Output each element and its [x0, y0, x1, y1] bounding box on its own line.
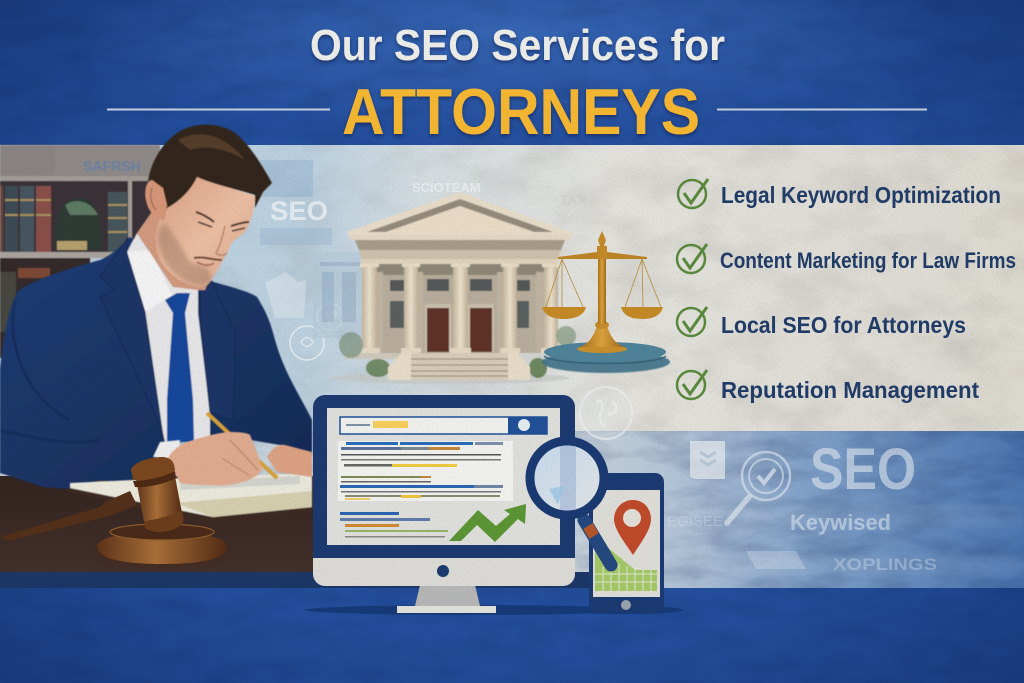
shrubs [339, 332, 363, 358]
stubble [158, 222, 212, 286]
monitor [305, 395, 683, 615]
watermark icons: lower right [667, 437, 937, 574]
watermark icons: SEO upper [260, 160, 588, 360]
jacket [0, 237, 312, 489]
eyes, brows, nose, mouth [196, 212, 249, 226]
icon: gavel [0, 457, 227, 566]
necktie [165, 293, 194, 442]
sleeve shading [0, 300, 100, 442]
notebook [62, 473, 312, 526]
watermark icons: lower right: Keywised [790, 510, 891, 535]
item: Local SEO for Attorneys: Local SEO for Attorneys [721, 312, 966, 338]
item: Reputation Management [677, 370, 979, 403]
panel: bookshelf background [0, 145, 160, 358]
person: attorney [0, 125, 312, 489]
stand [415, 585, 480, 606]
map pin [614, 500, 651, 555]
stairs [402, 353, 517, 380]
watermark icons: SEO upper: SEO [270, 196, 328, 226]
neck [137, 210, 215, 290]
watermark icons: SEO upper: TAX [560, 192, 588, 208]
hair [148, 125, 272, 220]
panel: bookshelf background: SAFRSH [83, 158, 141, 174]
service list [677, 179, 1016, 403]
shirt [127, 233, 210, 442]
frame [313, 395, 575, 586]
icon: green growth arrow [449, 504, 526, 542]
title [310, 21, 725, 148]
watermark icons: lower right: SEO [810, 437, 916, 502]
search bar [340, 417, 547, 434]
item: Legal Keyword Optimization: Legal Keyword Optimization [721, 182, 1001, 208]
left lapel [100, 238, 164, 443]
title: ATTORNEYS [342, 75, 700, 148]
hands and pencil [153, 413, 312, 486]
watermark icons: lower right: XOPLINGS [833, 555, 937, 574]
screen [327, 408, 560, 545]
columns [362, 266, 377, 352]
watermark icons: SEO upper: SCIOTEAM [412, 180, 481, 195]
ear [145, 180, 167, 219]
windows [390, 280, 405, 291]
panel: central light band [0, 145, 1024, 588]
phone [589, 473, 664, 613]
result rows [346, 442, 398, 445]
doors [425, 304, 451, 352]
face [156, 177, 255, 287]
map grid [595, 537, 657, 591]
item: Local SEO for Attorneys [677, 307, 966, 338]
right lapel [200, 281, 235, 420]
illustration: scales of justice [542, 231, 670, 373]
watermark icons: lower right: EGISEE [667, 513, 723, 530]
item: Reputation Management: Reputation Management [721, 377, 979, 403]
icon: magnifying glass [530, 441, 611, 565]
desk [0, 476, 600, 588]
pediment [347, 192, 573, 238]
watermark icon: ring near monitor [580, 387, 632, 439]
illustration: courthouse [330, 192, 576, 384]
secondary columns [375, 272, 383, 352]
title: Our SEO Services for [310, 21, 725, 70]
entablature [350, 235, 570, 240]
